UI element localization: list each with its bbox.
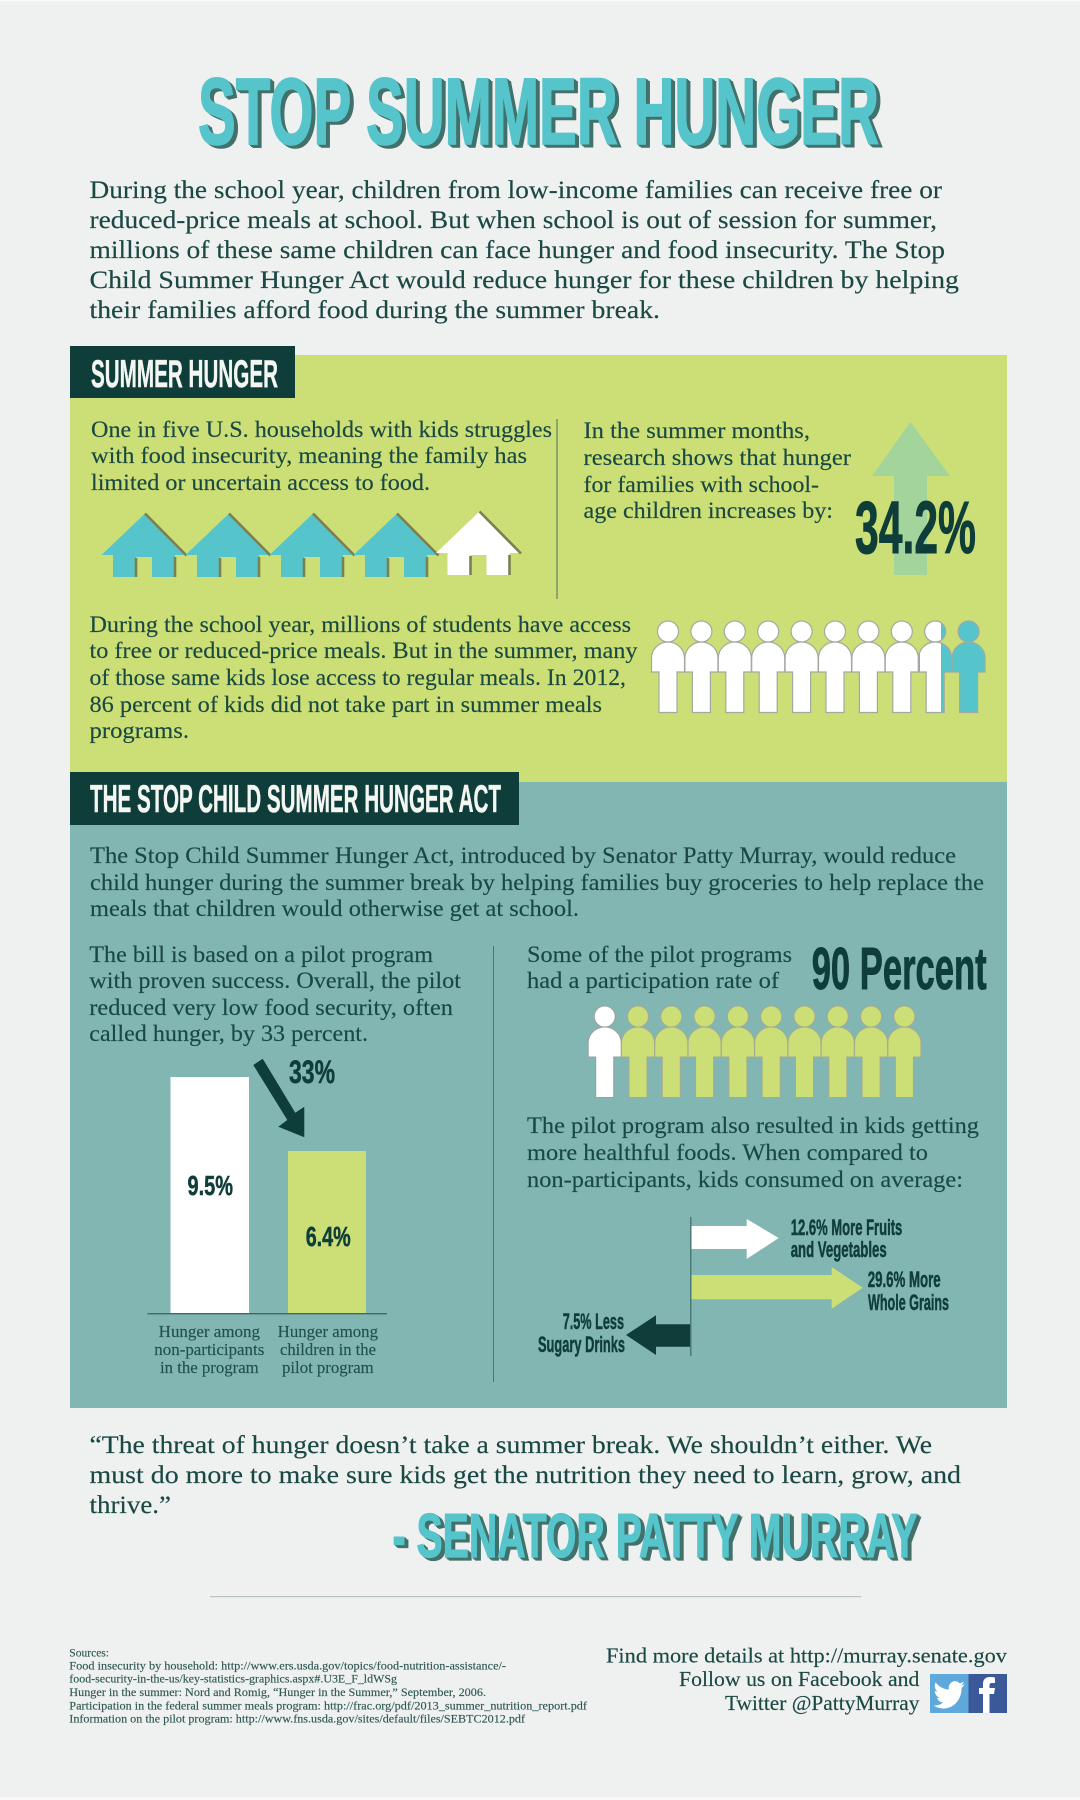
icon: five houses (102, 512, 521, 577)
label: sugary drinks (538, 1309, 625, 1357)
sources: food-security-in-the-us/key-statistics-graphics.aspx#.U3E_F_ldWSg (69, 1674, 397, 1686)
label: pilot children: Hunger among (278, 1322, 378, 1341)
quote: must do more to make sure kids get the nutrition they need to learn, grow, and (90, 1462, 962, 1489)
sources (69, 1648, 587, 1726)
label: non-participants (154, 1322, 264, 1377)
text: one in five households: One in five U.S. households with kids struggles (91, 417, 552, 442)
stat: 34.2 percent: 34.2% (855, 486, 976, 569)
label: fruits and vegetables (791, 1215, 902, 1262)
icon: twitter (930, 1674, 968, 1713)
label: whole grains: Whole Grains (868, 1290, 949, 1315)
panel: the stop child summer hunger act (70, 772, 1007, 1408)
heading: act (70, 772, 519, 825)
label: pilot children (278, 1322, 378, 1377)
text: pilot program basis: reduced very low food security, often (89, 995, 454, 1020)
text: pilot program basis: with proven success. Overall, the pilot (89, 968, 462, 993)
icon: facebook (968, 1674, 1007, 1713)
text: healthful foods (527, 1113, 980, 1192)
text: find more details: Twitter @PattyMurray (725, 1691, 920, 1715)
icon: row of ten people, 90 percent (588, 1006, 921, 1098)
intro text block: millions of these same children can face hunger and food insecurity. The Stop (90, 237, 945, 264)
label: fruits and vegetables: 12.6% More Fruits (791, 1215, 902, 1240)
heading: summer hunger: SUMMER HUNGER (91, 353, 278, 396)
label: non-participants: non-participants (154, 1340, 264, 1359)
arrow: sugary drinks (626, 1315, 690, 1355)
label: non-participants: in the program (160, 1358, 259, 1377)
intro text block: Child Summer Hunger Act would reduce hunger for these children by helping (90, 267, 960, 294)
bar: pilot program (288, 1151, 366, 1313)
text: pilot program basis: called hunger, by 33 percent. (89, 1021, 368, 1046)
text: one in five households (91, 417, 552, 495)
text: one in five households: limited or uncertain access to food. (91, 470, 430, 495)
text: find more details (606, 1644, 1008, 1715)
text: participation rate: Some of the pilot programs (527, 942, 792, 967)
text: healthful foods: more healthful foods. When compared to (527, 1140, 928, 1165)
heading: summer hunger (70, 346, 295, 398)
label: whole grains (868, 1267, 949, 1315)
arrow chart: food consumption (538, 1215, 949, 1357)
text: act description: child hunger during the summer break by helping families buy groceries to help replace the (90, 870, 984, 895)
text: one in five households: with food insecurity, meaning the family has (91, 443, 527, 468)
sources: Sources: (69, 1648, 109, 1660)
text: summer months research: for families with school- (584, 472, 819, 497)
text: pilot program basis (89, 942, 462, 1046)
label: whole grains: 29.6% More (868, 1267, 941, 1292)
text: school year access: During the school year, millions of students have access (90, 612, 631, 637)
heading: act: THE STOP CHILD SUMMER HUNGER ACT (90, 778, 501, 821)
panel: summer hunger (70, 346, 1007, 782)
sources: Participation in the federal summer meals program: http://frac.org/pdf/2013_summer_nutrition_report.pdf (69, 1700, 587, 1712)
icon: row of ten people (652, 621, 985, 712)
text: find more details: Find more details at http://murray.senate.gov (606, 1644, 1008, 1668)
sources: Hunger in the summer: Nord and Romig, “Hunger in the Summer,” September, 2006. (69, 1687, 486, 1699)
text: healthful foods: non-participants, kids consumed on average: (527, 1167, 963, 1192)
text: school year access: programs. (90, 718, 189, 743)
icon: up arrow (872, 422, 950, 575)
label: sugary drinks: Sugary Drinks (538, 1332, 625, 1357)
text: find more details: Follow us on Facebook and (679, 1667, 920, 1691)
arrow: 33 percent decrease (253, 1059, 304, 1137)
sources: Information on the pilot program: http://www.fns.usda.gov/sites/default/files/SEBTC2012.pdf (69, 1714, 525, 1726)
value: 6.4 percent: 6.4% (306, 1221, 351, 1252)
intro text block (90, 177, 960, 324)
intro text block: During the school year, children from low-income families can receive free or (90, 177, 943, 204)
text: summer months research (584, 418, 851, 523)
text: summer months research: research shows that hunger (584, 445, 851, 470)
sources: Food insecurity by household: http://www.ers.usda.gov/topics/food-nutrition-assistance/- (69, 1660, 506, 1672)
text: participation rate: had a participation rate of (527, 968, 779, 993)
label: pilot children: pilot program (282, 1358, 374, 1377)
text: act description: The Stop Child Summer Hunger Act, introduced by Senator Patty Murray, would reduce (90, 843, 956, 868)
intro text block: their families afford food during the summer break. (90, 297, 660, 324)
bar: non-participants (170, 1077, 249, 1313)
arrow: fruits and vegetables (692, 1219, 779, 1259)
text: act description: meals that children would otherwise get at school. (90, 896, 579, 921)
label: fruits and vegetables: and Vegetables (791, 1237, 887, 1262)
quote: “The threat of hunger doesn’t take a summer break. We shouldn’t either. We (90, 1432, 932, 1459)
label: non-participants: Hunger among (159, 1322, 260, 1341)
arrow: whole grains (692, 1267, 863, 1309)
text: school year access: 86 percent of kids did not take part in summer meals (90, 692, 602, 717)
label: pilot children: children in the (280, 1340, 376, 1359)
value: 33 percent: 33% (289, 1054, 335, 1090)
intro text block: reduced-price meals at school. But when school is out of session for summer, (90, 207, 937, 234)
value: 9.5 percent: 9.5% (188, 1170, 233, 1201)
text: summer months research: age children increases by: (584, 498, 833, 523)
text: healthful foods: The pilot program also resulted in kids getting (527, 1113, 980, 1138)
text: participation rate (527, 942, 792, 993)
text: pilot program basis: The bill is based on a pilot program (89, 942, 433, 967)
quote: thrive.” (90, 1492, 171, 1519)
text: school year access: of those same kids lose access to regular meals. In 2012, (90, 665, 626, 690)
text: school year access (90, 612, 638, 743)
label: sugary drinks: 7.5% Less (563, 1309, 624, 1334)
quote (90, 1432, 962, 1519)
bar chart: hunger reduction (148, 1054, 387, 1377)
text: act description (90, 843, 984, 921)
text: summer months research: In the summer months, (584, 418, 810, 443)
text: school year access: to free or reduced-price meals. But in the summer, many (90, 638, 638, 663)
